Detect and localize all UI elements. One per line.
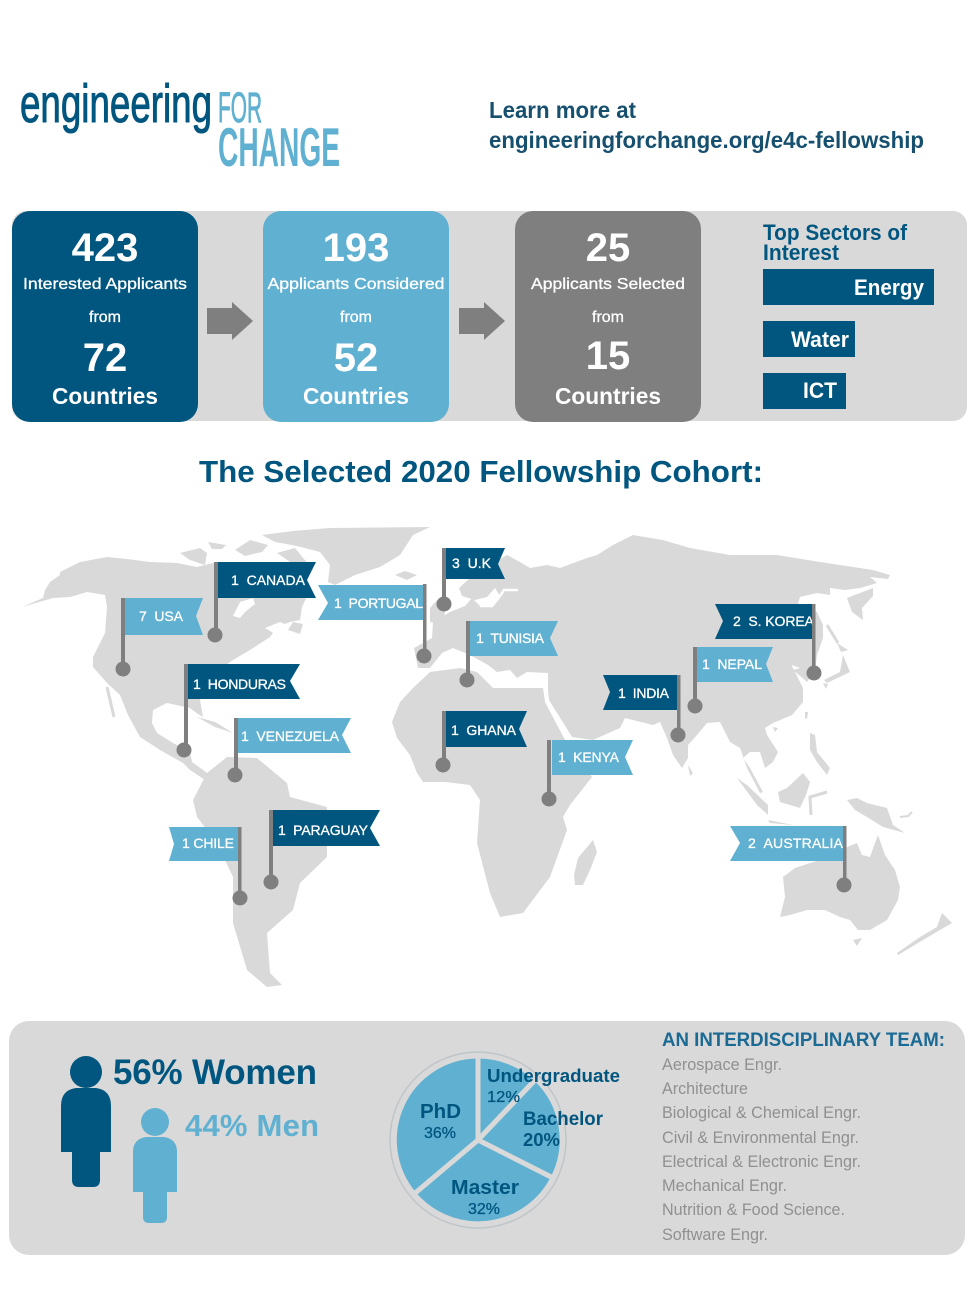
list: engineering disciplines: Aerospace Engr. (662, 1056, 782, 1074)
flag: Portugal (318, 584, 432, 664)
flag: Tunisia (460, 621, 558, 688)
flag: Australia (730, 826, 852, 892)
panel: applicants selected: 25 (586, 226, 630, 270)
panel: interested applicants: 72 (83, 336, 127, 380)
flag: Paraguay: 1 PARAGUAY (278, 822, 369, 838)
heading: interdisciplinary team: AN INTERDISCIPLINARY TEAM: (662, 1029, 945, 1051)
flag: Nepal (688, 647, 773, 714)
panel: applicants selected: 15 (586, 334, 630, 378)
list: engineering disciplines: Civil & Environmental Engr. (662, 1129, 859, 1147)
flag: U.K: 3 U.K (452, 555, 492, 571)
flag: India: 1 INDIA (618, 685, 670, 701)
flag: Honduras (176, 664, 300, 758)
icon: woman figure (61, 1056, 111, 1187)
pie chart: education levels: 32% (468, 1201, 500, 1218)
logo: engineering for change: engineering (20, 74, 212, 134)
flag: Nepal: 1 NEPAL (702, 656, 762, 672)
flag: U.K (436, 548, 505, 612)
list: engineering disciplines: Biological & Chemical Engr. (662, 1104, 861, 1122)
arrow: first step (207, 302, 253, 340)
flag: South Korea (715, 604, 822, 680)
panel: applicants considered: 193 (323, 226, 389, 270)
pie chart: education levels: PhD (420, 1101, 461, 1123)
panel: interested applicants: Interested Applicants (23, 276, 187, 293)
panel: interested applicants (12, 211, 198, 422)
text: learn more link: engineeringforchange.org/e4c-fellowship (489, 127, 924, 153)
text: learn more link (489, 97, 924, 153)
pie chart: education levels (390, 1052, 620, 1228)
panel: applicants selected: Applicants Selected (531, 276, 685, 293)
panel: applicants considered: from (340, 309, 372, 326)
flag: Chile (169, 827, 248, 906)
flag: Chile: 1 CHILE (182, 835, 234, 851)
list: engineering disciplines: Nutrition & Food Science. (662, 1201, 845, 1219)
list: engineering disciplines: Architecture (662, 1080, 748, 1098)
panel: top sectors of interest (763, 220, 934, 409)
flag: Canada: 1 CANADA (231, 572, 306, 588)
panel: applicants considered: 52 (334, 336, 378, 380)
flag: Portugal: 1 PORTUGAL (334, 595, 423, 611)
panel: interested applicants: 423 (72, 226, 138, 270)
list: engineering disciplines (662, 1056, 861, 1244)
flag: Kenya (542, 740, 633, 806)
pie chart: education levels: 12% (487, 1089, 520, 1106)
panel: applicants considered: Applicants Considered (268, 276, 444, 293)
text: learn more link: Learn more at (489, 97, 636, 123)
flag: Canada (208, 562, 316, 642)
panel: interested applicants: Countries (52, 383, 158, 409)
list: engineering disciplines: Electrical & Electronic Engr. (662, 1153, 861, 1171)
panel: applicants selected: from (592, 309, 624, 326)
panel: top sectors of interest: Energy (854, 275, 925, 300)
flag: Kenya: 1 KENYA (558, 749, 620, 765)
flag: Ghana: 1 GHANA (451, 722, 517, 738)
panel: selection funnel background (12, 211, 967, 421)
flag: Paraguay (264, 810, 380, 890)
panel: top sectors of interest: Top Sectors of (763, 220, 908, 245)
pie chart: education levels: 20% (523, 1130, 560, 1150)
pie chart: education levels: Undergraduate (487, 1065, 620, 1086)
flag: Venezuela (228, 718, 351, 782)
heading: selected cohort: The Selected 2020 Fellowship Cohort: (199, 454, 763, 489)
flag: USA (116, 598, 203, 676)
flag: India (603, 675, 686, 742)
pie chart: education levels: 36% (424, 1125, 456, 1142)
panel: demographics background (9, 1021, 965, 1255)
logo: engineering for change: FOR (218, 84, 262, 132)
flag: South Korea: 2 S. KOREA (733, 613, 815, 629)
panel: applicants considered: Countries (303, 383, 409, 409)
list: engineering disciplines: Software Engr. (662, 1226, 768, 1244)
flag: Venezuela: 1 VENEZUELA (241, 728, 340, 744)
flag: Honduras: 1 HONDURAS (193, 676, 286, 692)
logo: engineering for change: CHANGE (218, 116, 340, 178)
list: engineering disciplines: Mechanical Engr. (662, 1177, 787, 1195)
panel: top sectors of interest: Water (791, 327, 849, 352)
pie chart: education levels: Master (451, 1177, 519, 1199)
icon: man figure (133, 1108, 177, 1223)
panel: top sectors of interest: ICT (803, 378, 838, 403)
panel: top sectors of interest: Interest (763, 240, 840, 265)
world map (22, 527, 952, 987)
stat: men share: 44% Men (185, 1108, 319, 1143)
flag: Tunisia: 1 TUNISIA (476, 630, 545, 646)
flag: USA: 7 USA (139, 608, 184, 624)
panel: applicants selected: Countries (555, 383, 661, 409)
arrow: second step (459, 302, 505, 340)
flag: Australia: 2 AUSTRALIA (748, 835, 844, 851)
panel: applicants selected (515, 211, 701, 422)
pie chart: education levels: Bachelor (523, 1109, 604, 1130)
stat: women share: 56% Women (113, 1053, 317, 1092)
panel: applicants considered (263, 211, 449, 422)
logo: engineering for change (20, 74, 340, 178)
flag: Ghana (436, 711, 527, 772)
panel: interested applicants: from (89, 309, 121, 326)
